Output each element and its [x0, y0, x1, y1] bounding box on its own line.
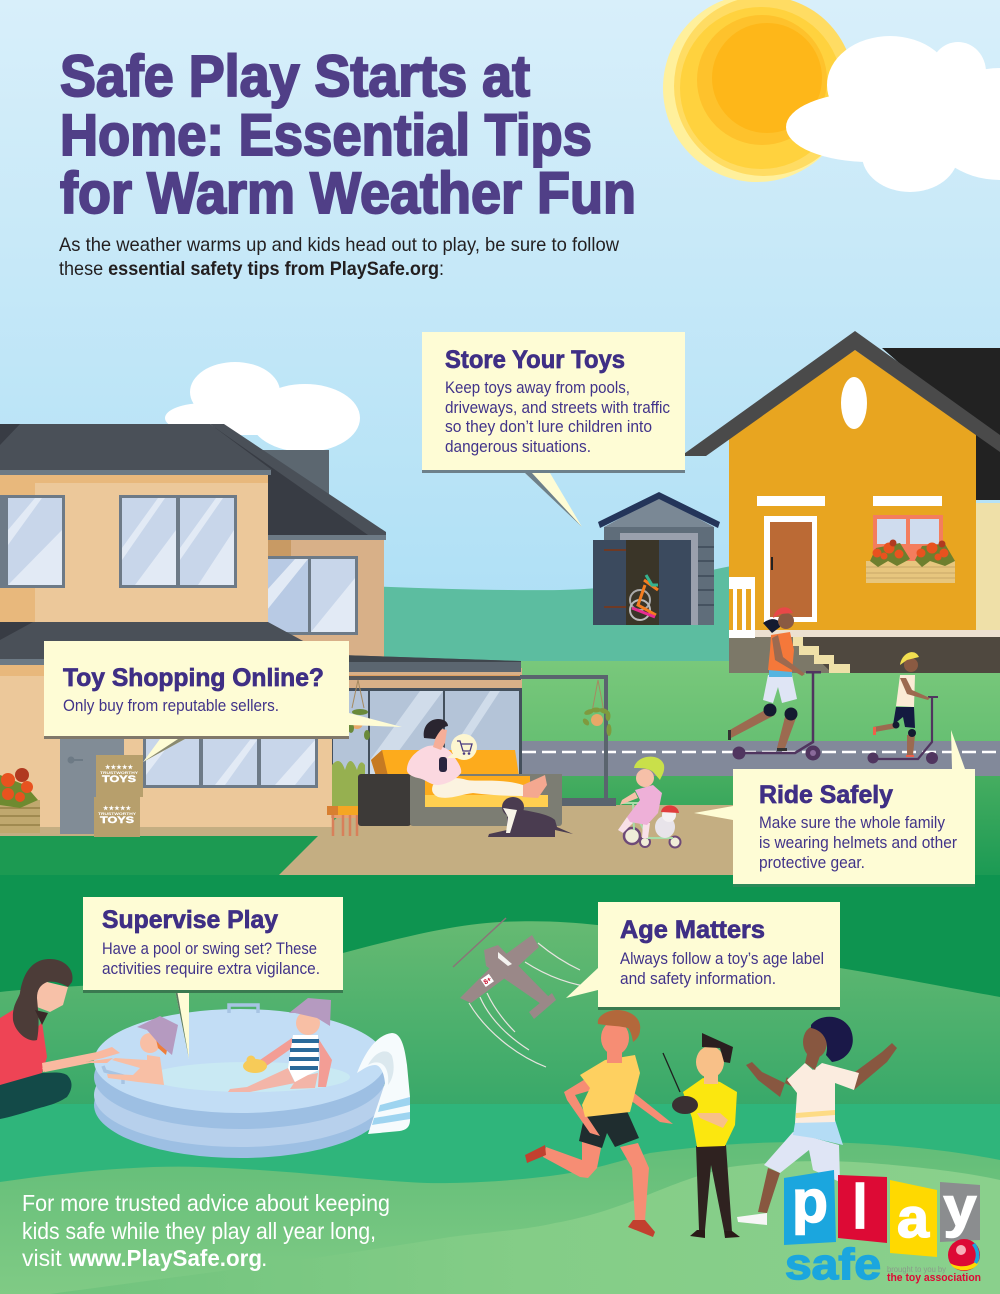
footer text: www.PlaySafe.org — [68, 1245, 262, 1271]
body: Have a pool or swing set? These — [102, 940, 317, 958]
neck and face — [433, 728, 447, 750]
wall — [729, 350, 976, 630]
icon: shopping cart bubble — [447, 734, 477, 760]
foreground hills — [0, 875, 1000, 1294]
swing frame with hanging plant — [520, 675, 616, 806]
shed — [593, 492, 720, 625]
body: protective gear. — [759, 854, 865, 872]
front leg — [620, 1143, 649, 1220]
lintels — [757, 496, 825, 506]
patio — [277, 805, 735, 877]
logo: play safe — [784, 1168, 981, 1289]
footer text: kids safe while they play all year long, — [22, 1218, 376, 1244]
shirt — [683, 1078, 737, 1147]
l tile — [838, 1175, 887, 1243]
body: so they don’t lure children into — [445, 418, 652, 436]
intro text: As the weather warms up and kids head out to play, be sure to follow — [59, 234, 620, 256]
title: for Warm Weather Fun — [60, 161, 636, 226]
heading: Ride Safely — [759, 781, 893, 809]
toy boxes: TRUSTWORTHY — [100, 771, 139, 775]
wing wall — [267, 540, 384, 660]
road — [500, 741, 1000, 776]
toy boxes: TRUSTWORTHY — [98, 812, 137, 816]
footer text: . — [261, 1245, 267, 1271]
ball icon — [948, 1239, 980, 1271]
kid with remote — [663, 1033, 740, 1238]
top — [0, 1010, 47, 1085]
back leg — [543, 1140, 601, 1178]
title: Home: Essential Tips — [60, 103, 592, 168]
body — [759, 814, 957, 872]
toy boxes — [94, 755, 143, 837]
body — [102, 940, 320, 978]
pants — [696, 1145, 732, 1232]
body: is wearing helmets and other — [759, 834, 957, 852]
safe wordmark: safe — [785, 1240, 881, 1289]
footer text — [22, 1190, 390, 1271]
skirt — [793, 1120, 843, 1145]
bikes — [630, 575, 658, 620]
planter with flowers — [866, 540, 955, 583]
body: activities require extra vigilance. — [102, 960, 320, 978]
icon: sun — [663, 0, 854, 182]
plane — [453, 918, 597, 1067]
body: Always follow a toy’s age label — [620, 950, 824, 968]
body: Keep toys away from pools, — [445, 379, 630, 397]
woman — [0, 959, 120, 1119]
body: Make sure the whole family — [759, 814, 946, 832]
brought to you by: brought to you by — [887, 1264, 947, 1274]
wing window — [267, 556, 358, 635]
footer text: For more trusted advice about keeping — [22, 1190, 390, 1216]
intro text: these essential safety tips from PlaySafe.org: — [59, 258, 444, 280]
intro text — [59, 234, 620, 280]
face — [37, 982, 68, 1012]
window middle — [119, 495, 237, 588]
hair — [598, 1010, 640, 1042]
body — [445, 379, 670, 456]
toy boxes: ★★★★★ — [103, 805, 132, 812]
p tile — [784, 1170, 836, 1245]
heading: Store Your Toys — [445, 346, 625, 374]
cloud: behind house — [165, 362, 360, 452]
heading: Supervise Play — [102, 906, 278, 934]
body: driveways, and streets with traffic — [445, 399, 670, 417]
hair — [424, 719, 448, 739]
rubber duck — [243, 1056, 267, 1073]
arms — [746, 1062, 793, 1097]
dog — [488, 797, 573, 837]
towel — [357, 1033, 410, 1134]
body: and safety information. — [620, 970, 776, 988]
heading: Age Matters — [620, 916, 765, 944]
doors — [593, 540, 626, 625]
roof — [0, 424, 272, 470]
y tile — [940, 1182, 980, 1242]
neck and head — [704, 1072, 718, 1084]
the toy association: the toy association — [887, 1272, 981, 1284]
stairs — [793, 637, 850, 673]
main wall — [0, 474, 268, 624]
kid with white tee — [737, 1017, 897, 1225]
sofa — [358, 750, 562, 826]
plane: 8+ — [483, 976, 493, 986]
body — [620, 950, 824, 988]
pants — [432, 778, 523, 798]
shorts — [579, 1111, 639, 1148]
porch rail — [729, 577, 755, 638]
child with duck — [228, 998, 332, 1092]
door — [60, 730, 124, 834]
door — [764, 516, 817, 622]
roof — [882, 348, 1000, 500]
arms — [564, 1078, 600, 1136]
sky background — [0, 0, 1000, 640]
phone — [439, 757, 447, 772]
trim and foundation — [729, 630, 1000, 638]
logo: play safe: y — [944, 1175, 976, 1238]
shoes — [525, 1145, 546, 1163]
heading: Toy Shopping Online? — [63, 664, 324, 692]
toy boxes: ★★★★★ — [105, 764, 134, 771]
top — [407, 746, 461, 785]
window — [873, 515, 943, 567]
pool scene — [0, 959, 410, 1158]
hair — [702, 1033, 733, 1063]
cloud: top right — [786, 36, 1000, 192]
body: Only buy from reputable sellers. — [63, 697, 279, 715]
callout: age matters — [566, 902, 840, 1010]
main house lower — [0, 622, 332, 837]
flower planter — [0, 768, 40, 833]
toy boxes: TOYS — [102, 774, 136, 785]
hanging plant small — [348, 680, 370, 740]
logo: play safe: a — [897, 1186, 930, 1249]
arm — [697, 1113, 728, 1128]
shirt — [787, 1063, 859, 1123]
neck and head — [805, 1050, 822, 1070]
toddler on bike — [618, 757, 680, 848]
hair — [811, 1017, 853, 1062]
callout: ride safely — [694, 730, 975, 887]
window left — [0, 495, 65, 588]
hair — [13, 959, 73, 1040]
round window — [841, 377, 867, 429]
sunroom — [332, 655, 522, 810]
kid with yellow tee — [525, 1010, 673, 1237]
child with hat — [107, 1016, 178, 1085]
callout: store your toys — [422, 332, 685, 527]
main house upper — [0, 424, 386, 660]
plant and side table — [327, 761, 365, 836]
neck and head — [607, 1045, 622, 1063]
footer text: visit — [22, 1245, 62, 1271]
back house — [681, 331, 1000, 673]
pool — [94, 1005, 386, 1158]
adult on scooter — [728, 607, 821, 760]
logo: play safe: l — [852, 1173, 868, 1242]
ground window — [143, 730, 318, 788]
woman on sofa — [407, 719, 547, 798]
title — [60, 44, 636, 226]
legs — [0, 1072, 72, 1119]
a tile — [890, 1180, 937, 1257]
leg and shoe — [758, 1168, 780, 1213]
callout: toy shopping online — [44, 641, 402, 762]
side wall — [976, 503, 1000, 633]
title: Safe Play Starts at — [60, 44, 530, 109]
logo: play safe: p — [792, 1168, 828, 1235]
toy boxes: TOYS — [100, 815, 134, 826]
feet — [522, 775, 547, 798]
shirt — [580, 1055, 640, 1117]
antenna and remote — [663, 1053, 680, 1092]
child on scooter — [868, 652, 938, 764]
body: dangerous situations. — [445, 438, 591, 456]
callout: supervise play — [83, 897, 343, 1059]
background hills and lawn — [0, 540, 1000, 906]
arms — [42, 1047, 120, 1072]
shorts — [764, 1132, 840, 1182]
